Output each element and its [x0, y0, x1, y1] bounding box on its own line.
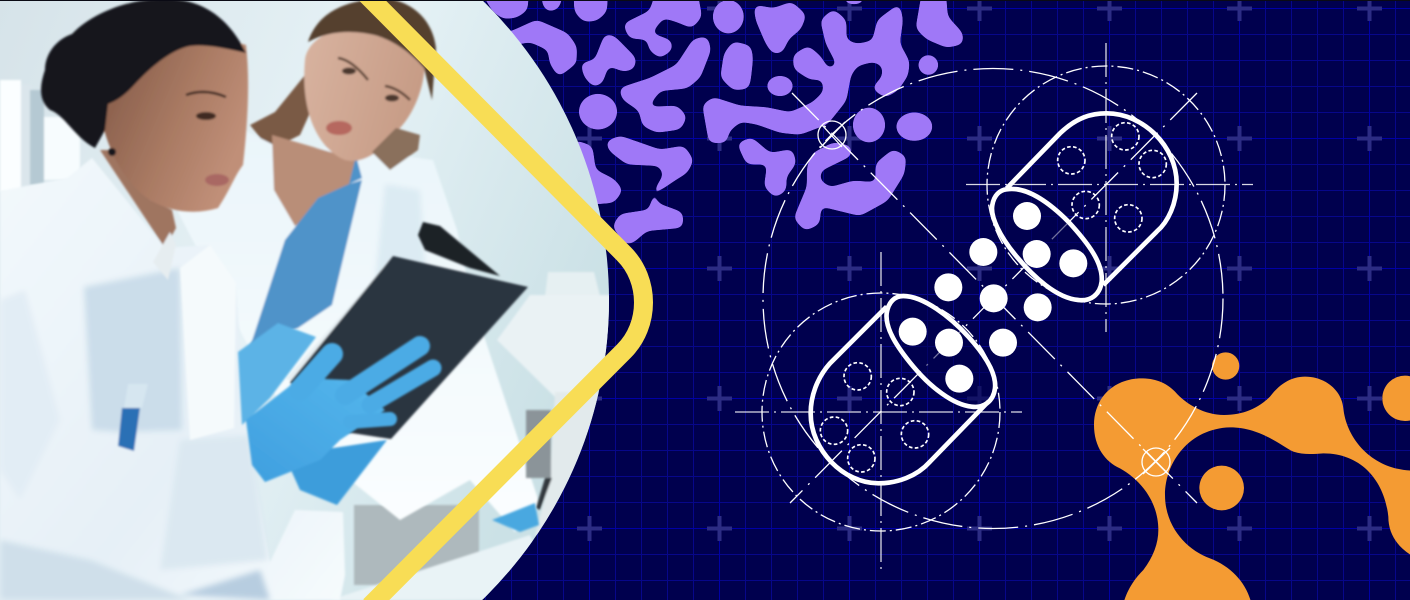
lapel: [180, 245, 236, 440]
hair: [308, 0, 436, 100]
capsule body: [1007, 113, 1177, 285]
capsule opening: [887, 296, 995, 407]
hair and bun: [41, 0, 246, 148]
capsule opening: [992, 189, 1102, 300]
lab windows: [0, 80, 80, 192]
filled granules: [899, 318, 973, 393]
ponytail: [248, 76, 310, 145]
capsule lower left: [811, 296, 995, 483]
facial features: [326, 58, 410, 135]
capsule body: [811, 307, 988, 483]
upper construction circle: [987, 66, 1225, 304]
photo backdrop: [0, 0, 620, 600]
purple organic pattern: [480, 0, 963, 244]
lab coat: [0, 158, 345, 600]
lab bench: [340, 504, 534, 600]
neck: [272, 135, 358, 226]
microscope: [418, 222, 612, 535]
dispersed dots between capsules: [934, 238, 1052, 357]
face: [100, 39, 248, 212]
neck: [100, 150, 176, 248]
shirt collar: [156, 231, 174, 279]
front hand: [246, 346, 433, 482]
capsule upper right: [992, 113, 1177, 300]
filled granules: [1013, 202, 1087, 277]
dashed granules: [820, 363, 929, 472]
scientist one: [0, 0, 345, 600]
yellow chevron outline: [366, 0, 644, 600]
facial details: [108, 92, 229, 186]
coat shadow folds: [0, 268, 270, 600]
lower hand: [291, 440, 387, 505]
blue shirt: [250, 156, 362, 347]
lower centre lines: [735, 252, 1022, 573]
blue gloves: [238, 323, 539, 532]
lab coat: [178, 126, 540, 532]
coat shading: [376, 185, 426, 274]
orange organic blob: [1094, 352, 1410, 600]
test tube in pocket: [118, 408, 140, 451]
scientist two: [178, 0, 540, 532]
lower construction circle: [762, 293, 1000, 531]
top edge line: [0, 0, 1410, 1]
face: [304, 26, 425, 161]
dashed granules: [1058, 123, 1166, 232]
diagonal axes: [790, 93, 1197, 503]
orange droplets: [1199, 352, 1410, 510]
upper centre lines: [966, 43, 1253, 332]
blueprint construction lines: [735, 43, 1253, 573]
distant hand: [492, 503, 539, 532]
target marker lower right: [1142, 448, 1170, 476]
photo: two scientists with tablet and microscope: [0, 0, 620, 600]
tablet: [286, 256, 528, 439]
back hand: [238, 323, 316, 425]
target marker upper left: [818, 121, 846, 149]
hair tuft behind neck: [372, 128, 420, 170]
large construction circle: [763, 68, 1223, 528]
